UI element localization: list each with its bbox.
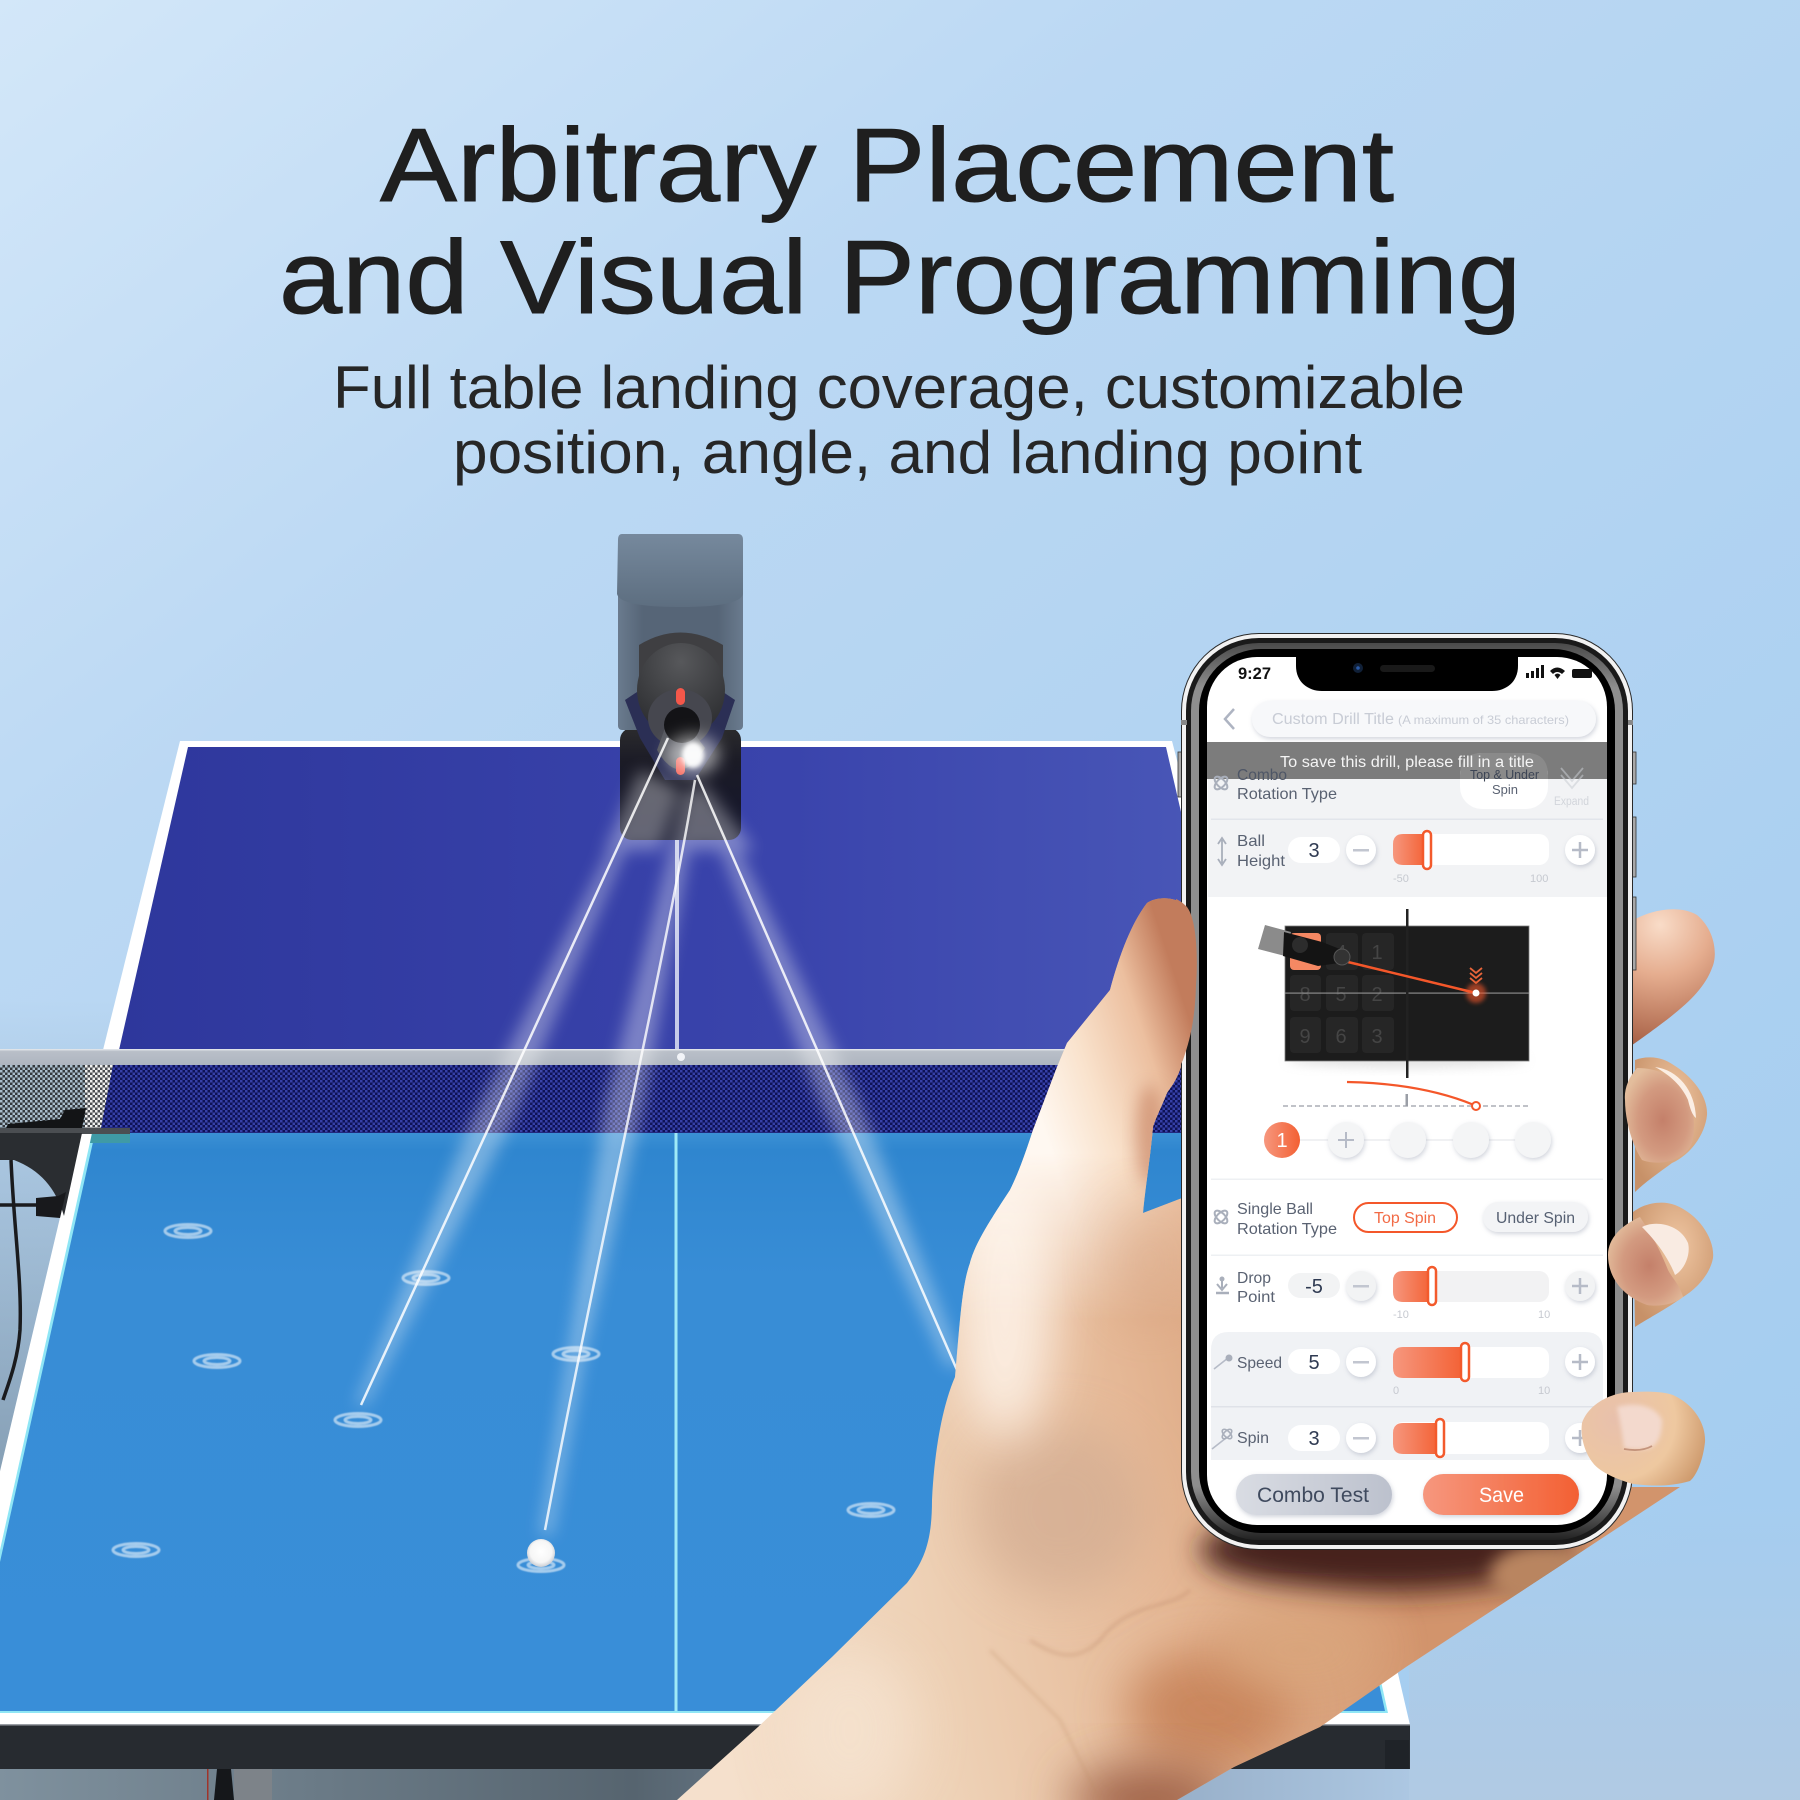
- save button: [1423, 1474, 1579, 1515]
- row: drop point: [1216, 1267, 1595, 1321]
- row: combo rotation type: Spin: [1492, 782, 1518, 797]
- table tennis table: [0, 741, 1410, 1800]
- near half of table: [0, 1133, 1410, 1769]
- row: speed: 0: [1393, 1385, 1399, 1397]
- title: Arbitrary Placement: [380, 108, 1394, 224]
- row: combo rotation type: Rotation Type: [1237, 786, 1337, 803]
- top spin button: [1354, 1203, 1457, 1232]
- zone tiles: 1: [1371, 942, 1383, 964]
- ball machine: [617, 534, 743, 840]
- row: ball height: Ball: [1237, 833, 1265, 850]
- row: combo rotation type: Combo: [1237, 767, 1287, 784]
- combo test button: [1236, 1474, 1392, 1515]
- hand: little finger: [1582, 1392, 1705, 1486]
- toast message: To save this drill, please fill in a title: [1280, 754, 1534, 771]
- row: combo rotation type: [1207, 742, 1607, 897]
- hand: thumb, palm and forearm: [660, 880, 1710, 1800]
- row: drop point: -10: [1393, 1309, 1409, 1321]
- side view trajectory: [1283, 1082, 1531, 1110]
- zone tiles: 6: [1335, 1026, 1347, 1048]
- trajectory glows: [356, 770, 963, 1535]
- row: drop point: -5: [1305, 1276, 1323, 1298]
- smartphone: [1178, 633, 1636, 1550]
- ping pong ball: [527, 1539, 555, 1567]
- finger 1 behind phone: [1625, 909, 1715, 1050]
- row: ball height: Height: [1237, 853, 1286, 870]
- target dot: [1466, 983, 1486, 1003]
- subtitle: Full table landing coverage, customizable: [333, 354, 1465, 421]
- notch: [1296, 657, 1518, 691]
- save button: Save: [1479, 1484, 1524, 1507]
- net clamp and cable: [0, 1108, 86, 1400]
- combo test button: Combo Test: [1257, 1484, 1369, 1507]
- target chevrons: [1470, 968, 1482, 983]
- row: single ball rotation type: Rotation Type: [1237, 1221, 1337, 1238]
- subtitle: position, angle, and landing point: [453, 419, 1362, 486]
- subtitle: [333, 354, 1465, 486]
- row: ball height: 100: [1530, 873, 1548, 885]
- row: speed: [1211, 1332, 1603, 1406]
- drill title field: (A maximum of 35 characters): [1398, 713, 1569, 727]
- trajectory on table: [1348, 962, 1476, 993]
- ball trajectories: [356, 735, 963, 1535]
- landing point ripples: [113, 1224, 894, 1572]
- zone tiles: 5: [1335, 984, 1347, 1006]
- step selector: [1264, 1122, 1551, 1158]
- drill title field: [1252, 701, 1596, 737]
- zone tiles: [1290, 933, 1394, 1053]
- row: drop point: Drop: [1237, 1270, 1271, 1287]
- table diagram: [1258, 909, 1529, 1078]
- muzzle flash: [667, 735, 719, 775]
- hand: ring finger: [1608, 1203, 1713, 1327]
- under spin button: Under Spin: [1496, 1210, 1575, 1227]
- row: ball height: -50: [1393, 873, 1409, 885]
- row: drop point: Point: [1237, 1289, 1276, 1306]
- mini machine: [1258, 925, 1350, 966]
- row: speed: 10: [1538, 1385, 1550, 1397]
- zone tiles: 4: [1335, 942, 1347, 964]
- table legs: [207, 1769, 272, 1800]
- phone screen: [1207, 657, 1607, 1525]
- zone tiles: 3: [1371, 1026, 1383, 1048]
- row: combo rotation type: Expand: [1554, 796, 1589, 808]
- row: single ball rotation type: [1213, 1201, 1588, 1238]
- title: and Visual Programming: [279, 220, 1521, 336]
- under spin button: [1483, 1202, 1588, 1232]
- step selector: 1: [1276, 1130, 1288, 1152]
- zone tiles: 9: [1299, 1026, 1311, 1048]
- status icons: [1526, 665, 1592, 679]
- trajectory lines: [361, 738, 957, 1530]
- row: spin: Spin: [1237, 1430, 1269, 1447]
- hand: thumb tip over phone edge: [1176, 899, 1197, 1064]
- row: ball height: [1211, 818, 1603, 885]
- row: spin: 3: [1308, 1428, 1320, 1450]
- top spin button: Top Spin: [1374, 1210, 1436, 1227]
- back chevron: [1225, 709, 1234, 729]
- row: drop point: 10: [1538, 1309, 1550, 1321]
- zone tiles: 8: [1299, 984, 1311, 1006]
- far half of table: [103, 741, 1252, 1052]
- phone frame: [1181, 633, 1633, 1550]
- zone tiles: 2: [1371, 984, 1383, 1006]
- row: speed: 5: [1308, 1352, 1320, 1374]
- hand: middle finger: [1625, 1057, 1707, 1192]
- title: [279, 108, 1521, 336]
- camera and speaker: [1353, 663, 1435, 673]
- row: spin: [1211, 1406, 1603, 1460]
- net: [0, 1049, 1200, 1134]
- status bar time: 9:27: [1238, 664, 1271, 683]
- row: speed: Speed: [1237, 1355, 1282, 1372]
- row: combo rotation type: Top & Under: [1470, 767, 1540, 782]
- row: single ball rotation type: Single Ball: [1237, 1201, 1313, 1218]
- drill title field: Custom Drill Title: [1272, 711, 1394, 728]
- phone side buttons: [1178, 752, 1636, 970]
- row: ball height: 3: [1308, 840, 1320, 862]
